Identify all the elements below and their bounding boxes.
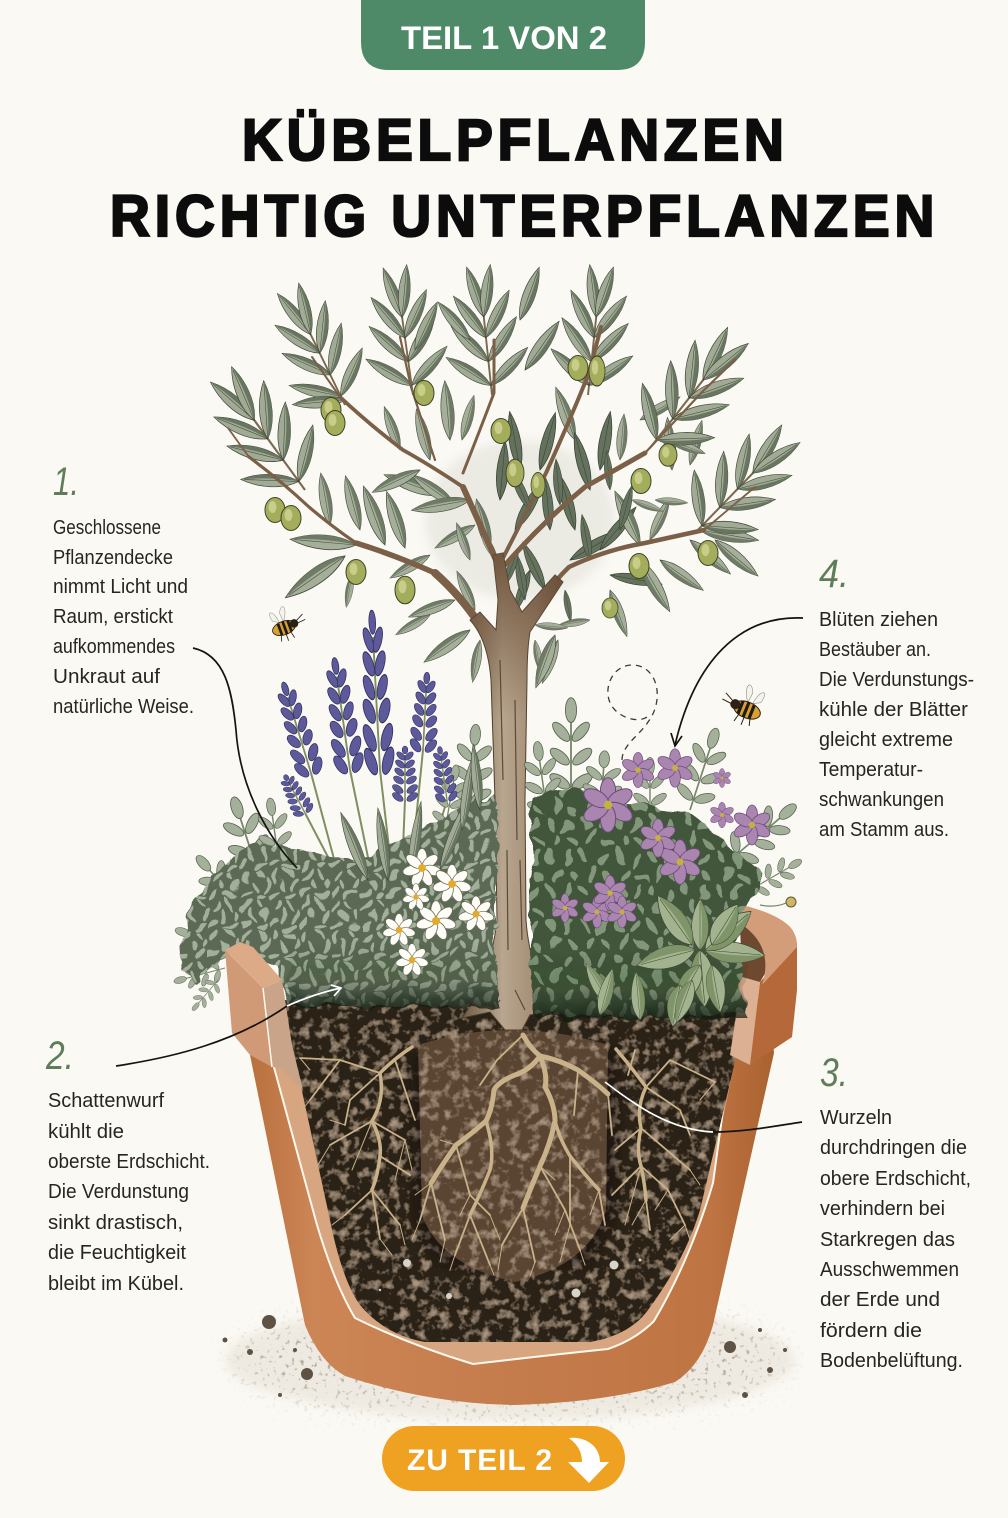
text block 3: Bodenbelüftung.	[820, 1350, 963, 1372]
text block 2: sinkt drastisch,	[48, 1212, 183, 1234]
text block 3: Starkregen das	[820, 1229, 955, 1251]
title: KÜBELPFLANZEN	[242, 107, 784, 173]
text block 1: natürliche Weise.	[53, 696, 194, 718]
text block 4: schwankungen	[819, 789, 944, 811]
sage leaves	[580, 890, 766, 1028]
lavender blades	[336, 744, 485, 882]
soil	[284, 1000, 744, 1342]
text block 3: fördern die	[820, 1320, 922, 1342]
bee left	[266, 601, 310, 645]
text block 3: verhindern bei	[820, 1198, 945, 1220]
title: RICHTIG UNTERPFLANZEN	[110, 183, 934, 249]
text block 4: kühle der Blätter	[819, 699, 968, 721]
purple flowers	[551, 749, 772, 928]
white daisies	[382, 848, 495, 977]
right rim of pot	[730, 903, 797, 1065]
text block 4: Die Verdunstungs-	[819, 669, 974, 691]
text block 1: 1.	[53, 460, 79, 504]
text block 3	[820, 1051, 971, 1372]
next-part button: ZU TEIL 2	[407, 1444, 552, 1477]
lavender spikes	[267, 609, 460, 821]
pointer 3: text to roots	[605, 1082, 802, 1132]
silver foliage mass	[180, 795, 497, 1006]
text block 1: Geschlossene	[53, 517, 161, 539]
left rim of pot	[225, 942, 303, 1090]
text block 4: Blüten ziehen	[819, 609, 938, 631]
lavender stems	[305, 750, 447, 940]
text block 3: der Erde und	[820, 1289, 940, 1311]
text block 4: Bestäuber an.	[819, 639, 931, 661]
branches	[228, 327, 755, 625]
text block 4	[819, 552, 974, 841]
text block 3: obere Erdschicht,	[820, 1168, 971, 1190]
faded inner canopy	[425, 440, 615, 600]
white highlight edge	[272, 1059, 730, 1364]
text block 1: Raum, erstickt	[53, 606, 173, 628]
leaves inside the crown	[281, 380, 762, 690]
text block 2: Die Verdunstung	[48, 1181, 189, 1203]
dark gap around root ball	[410, 1050, 618, 1265]
text block 1: Pflanzendecke	[53, 547, 173, 569]
bee right	[716, 677, 769, 730]
pointer 2: text to shaded soil	[116, 985, 341, 1066]
olives	[265, 356, 718, 618]
soil pebbles	[379, 1258, 642, 1299]
pointer 1: text to foliage	[193, 648, 297, 868]
text block 2: Schattenwurf	[48, 1090, 164, 1112]
cut face of pot wall	[272, 977, 742, 1364]
text block 4: 4.	[819, 552, 849, 596]
header badge: Teil 1 von 2: TEIL 1 VON 2	[401, 20, 607, 56]
title	[110, 107, 934, 249]
upright sprigs	[517, 698, 810, 903]
edge sprigs	[170, 723, 498, 1017]
shadow at base of foliage	[285, 940, 497, 1008]
text block 2: kühlt die	[48, 1121, 124, 1143]
text block 2: 2.	[45, 1034, 74, 1078]
next-part button	[382, 1426, 625, 1491]
trunk	[462, 553, 563, 1030]
terracotta pot with soil cutaway	[250, 903, 797, 1405]
text block 3: Ausschwemmen	[820, 1259, 959, 1281]
yellow seed tip	[760, 897, 796, 907]
leafy sprigs at the crown edge	[180, 259, 825, 566]
text block 4: gleicht extreme	[819, 729, 953, 751]
text block 2: oberste Erdschicht.	[48, 1151, 210, 1173]
text block 3: 3.	[820, 1051, 848, 1095]
text block 3: Wurzeln	[820, 1107, 892, 1129]
text block 2: bleibt im Kübel.	[48, 1273, 184, 1295]
lavender and underplanting, left	[170, 609, 498, 1017]
header badge: Teil 1 von 2	[361, 0, 645, 70]
dashed bee flight path	[608, 665, 657, 760]
text block 4: Temperatur-	[819, 759, 923, 781]
text block 1: aufkommendes	[53, 636, 175, 658]
text block 4: am Stamm aus.	[819, 819, 949, 841]
shadow at base of right foliage	[530, 950, 745, 1018]
foliage mass right	[530, 790, 765, 1018]
pot outer body	[250, 1000, 774, 1405]
text block 2: die Feuchtigkeit	[48, 1242, 186, 1264]
roots	[298, 1035, 715, 1276]
pointer 4: text to flowers	[671, 618, 803, 746]
root ball	[418, 1030, 608, 1282]
text block 3: durchdringen die	[820, 1137, 967, 1159]
text block 1	[53, 460, 194, 718]
olive tree	[180, 259, 825, 1030]
icon: down arrow	[568, 1438, 609, 1483]
text block 1: nimmt Licht und	[53, 576, 188, 598]
ground with scattered soil	[222, 1300, 795, 1420]
text block 1: Unkraut auf	[53, 666, 160, 688]
text block 2	[45, 1034, 210, 1295]
flowering perennials, right	[517, 698, 810, 1028]
